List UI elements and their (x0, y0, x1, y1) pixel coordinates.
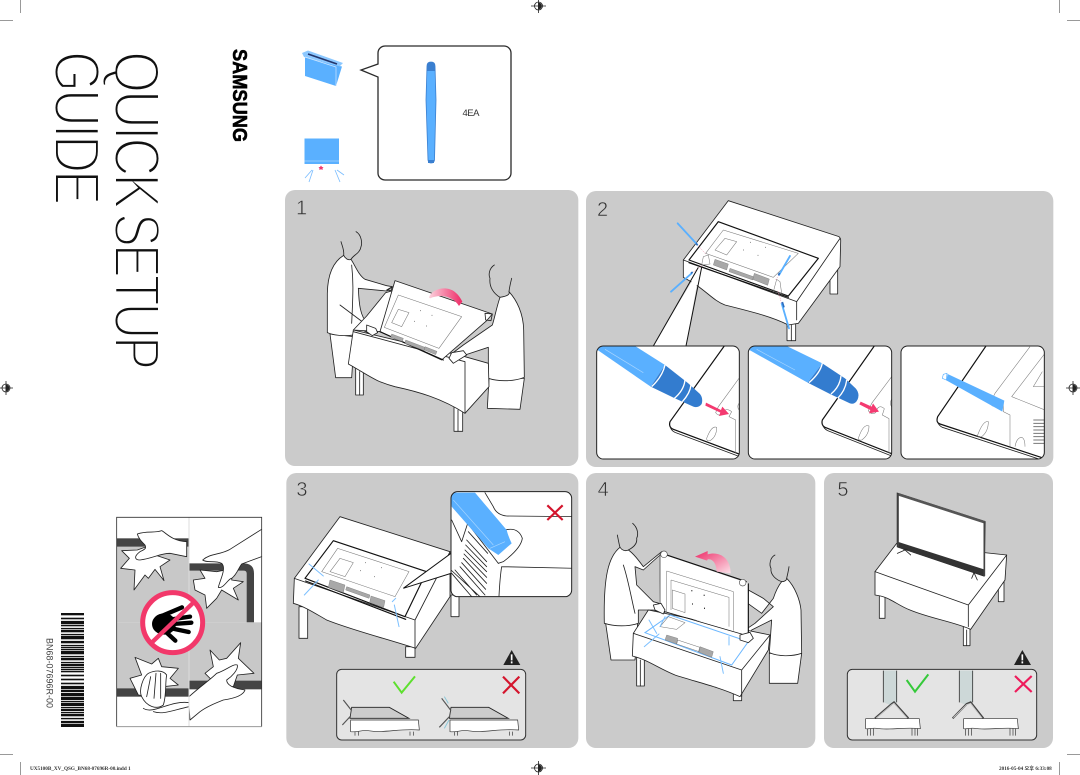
barcode (61, 613, 84, 727)
table edge lines (353, 332, 465, 413)
incorrect stand (953, 671, 1018, 736)
TV upright (659, 551, 748, 636)
TV on table (304, 541, 427, 627)
quadrant bottom-left (117, 622, 189, 713)
caution box (337, 669, 526, 740)
divider (187, 517, 190, 727)
panel: do not touch the screen (117, 517, 262, 727)
table back corner (353, 290, 395, 332)
green check (907, 674, 928, 692)
panel: step 1 (285, 190, 578, 466)
panel: step 2 (586, 191, 1053, 467)
icon: stand leg (426, 62, 436, 163)
frame (117, 517, 262, 727)
logo: SAMSUNG: SAMSUNG (228, 49, 250, 142)
TV on table (689, 222, 818, 297)
quadrant bottom-right (189, 622, 262, 720)
table legs (356, 367, 463, 431)
panel: step 5 (824, 473, 1053, 748)
registration mark: right (1066, 381, 1080, 395)
table (293, 517, 450, 648)
frame bottom (117, 725, 262, 728)
title: GUIDE: GUIDE (40, 51, 114, 203)
correct stand (866, 671, 920, 736)
table legs (637, 655, 742, 701)
zoom inset (451, 492, 575, 597)
barcode number: BN68-07696R-00 (44, 638, 54, 708)
hands (653, 603, 753, 643)
registration mark: left (0, 381, 13, 395)
inset 1 (597, 345, 742, 459)
title: SETUP: SETUP (100, 213, 174, 367)
step number 4: 4 (598, 479, 609, 501)
quadrant top-left (117, 531, 189, 622)
step number 2: 2 (597, 199, 608, 221)
footer: file name: UX5100B_XV_QSG_BN68-07696R-00.indd 1 (30, 766, 131, 772)
arrow: raise (695, 551, 731, 573)
icon: TV screen (304, 138, 344, 182)
table (683, 201, 841, 325)
TV base on table (645, 615, 748, 665)
right person (740, 555, 802, 683)
registration mark: bottom (531, 761, 546, 775)
step number 3: 3 (296, 479, 307, 501)
correct mini TV (342, 700, 419, 736)
icon: open TV box (302, 50, 343, 86)
callout: included stands (361, 46, 511, 180)
table legs (787, 270, 838, 341)
red X (547, 505, 563, 520)
stand legs guides (644, 617, 729, 673)
red X (503, 677, 519, 693)
left person (327, 232, 392, 378)
stand legs with guides (671, 223, 790, 328)
incorrect mini TV (439, 697, 519, 736)
left person (604, 523, 665, 660)
zoom wedge lines (653, 267, 702, 346)
step number 5: 5 (837, 479, 848, 501)
table (348, 330, 489, 413)
green check (394, 676, 415, 693)
quadrant top-right (189, 529, 262, 622)
TV back (367, 281, 492, 363)
icon: warning (1014, 650, 1031, 665)
black hand (152, 607, 191, 641)
panel: step 3 (286, 473, 578, 748)
inset 3 (901, 345, 1045, 461)
prohibition slash (152, 603, 193, 643)
icon: no touching (143, 593, 203, 653)
label: 4EA: 4EA (462, 108, 480, 119)
table (875, 543, 1007, 629)
zoom wedge (653, 267, 700, 346)
icon: warning (503, 650, 520, 665)
registration mark: top (531, 0, 546, 13)
table (632, 610, 770, 697)
zoom wedge (403, 553, 451, 588)
pink X (1015, 676, 1032, 692)
table legs (879, 580, 1004, 646)
right person (450, 265, 524, 409)
footer: date stamp: 2016-05-04 오후 6:33:08 (999, 764, 1052, 772)
TV front (897, 493, 985, 580)
panel: step 4 (586, 473, 815, 748)
caution box (847, 669, 1037, 740)
arrow: tilt (429, 288, 462, 306)
step number 1: 1 (296, 198, 307, 220)
title: QUICK: QUICK (100, 51, 174, 209)
inset 2 (748, 345, 893, 459)
table legs (299, 595, 459, 657)
